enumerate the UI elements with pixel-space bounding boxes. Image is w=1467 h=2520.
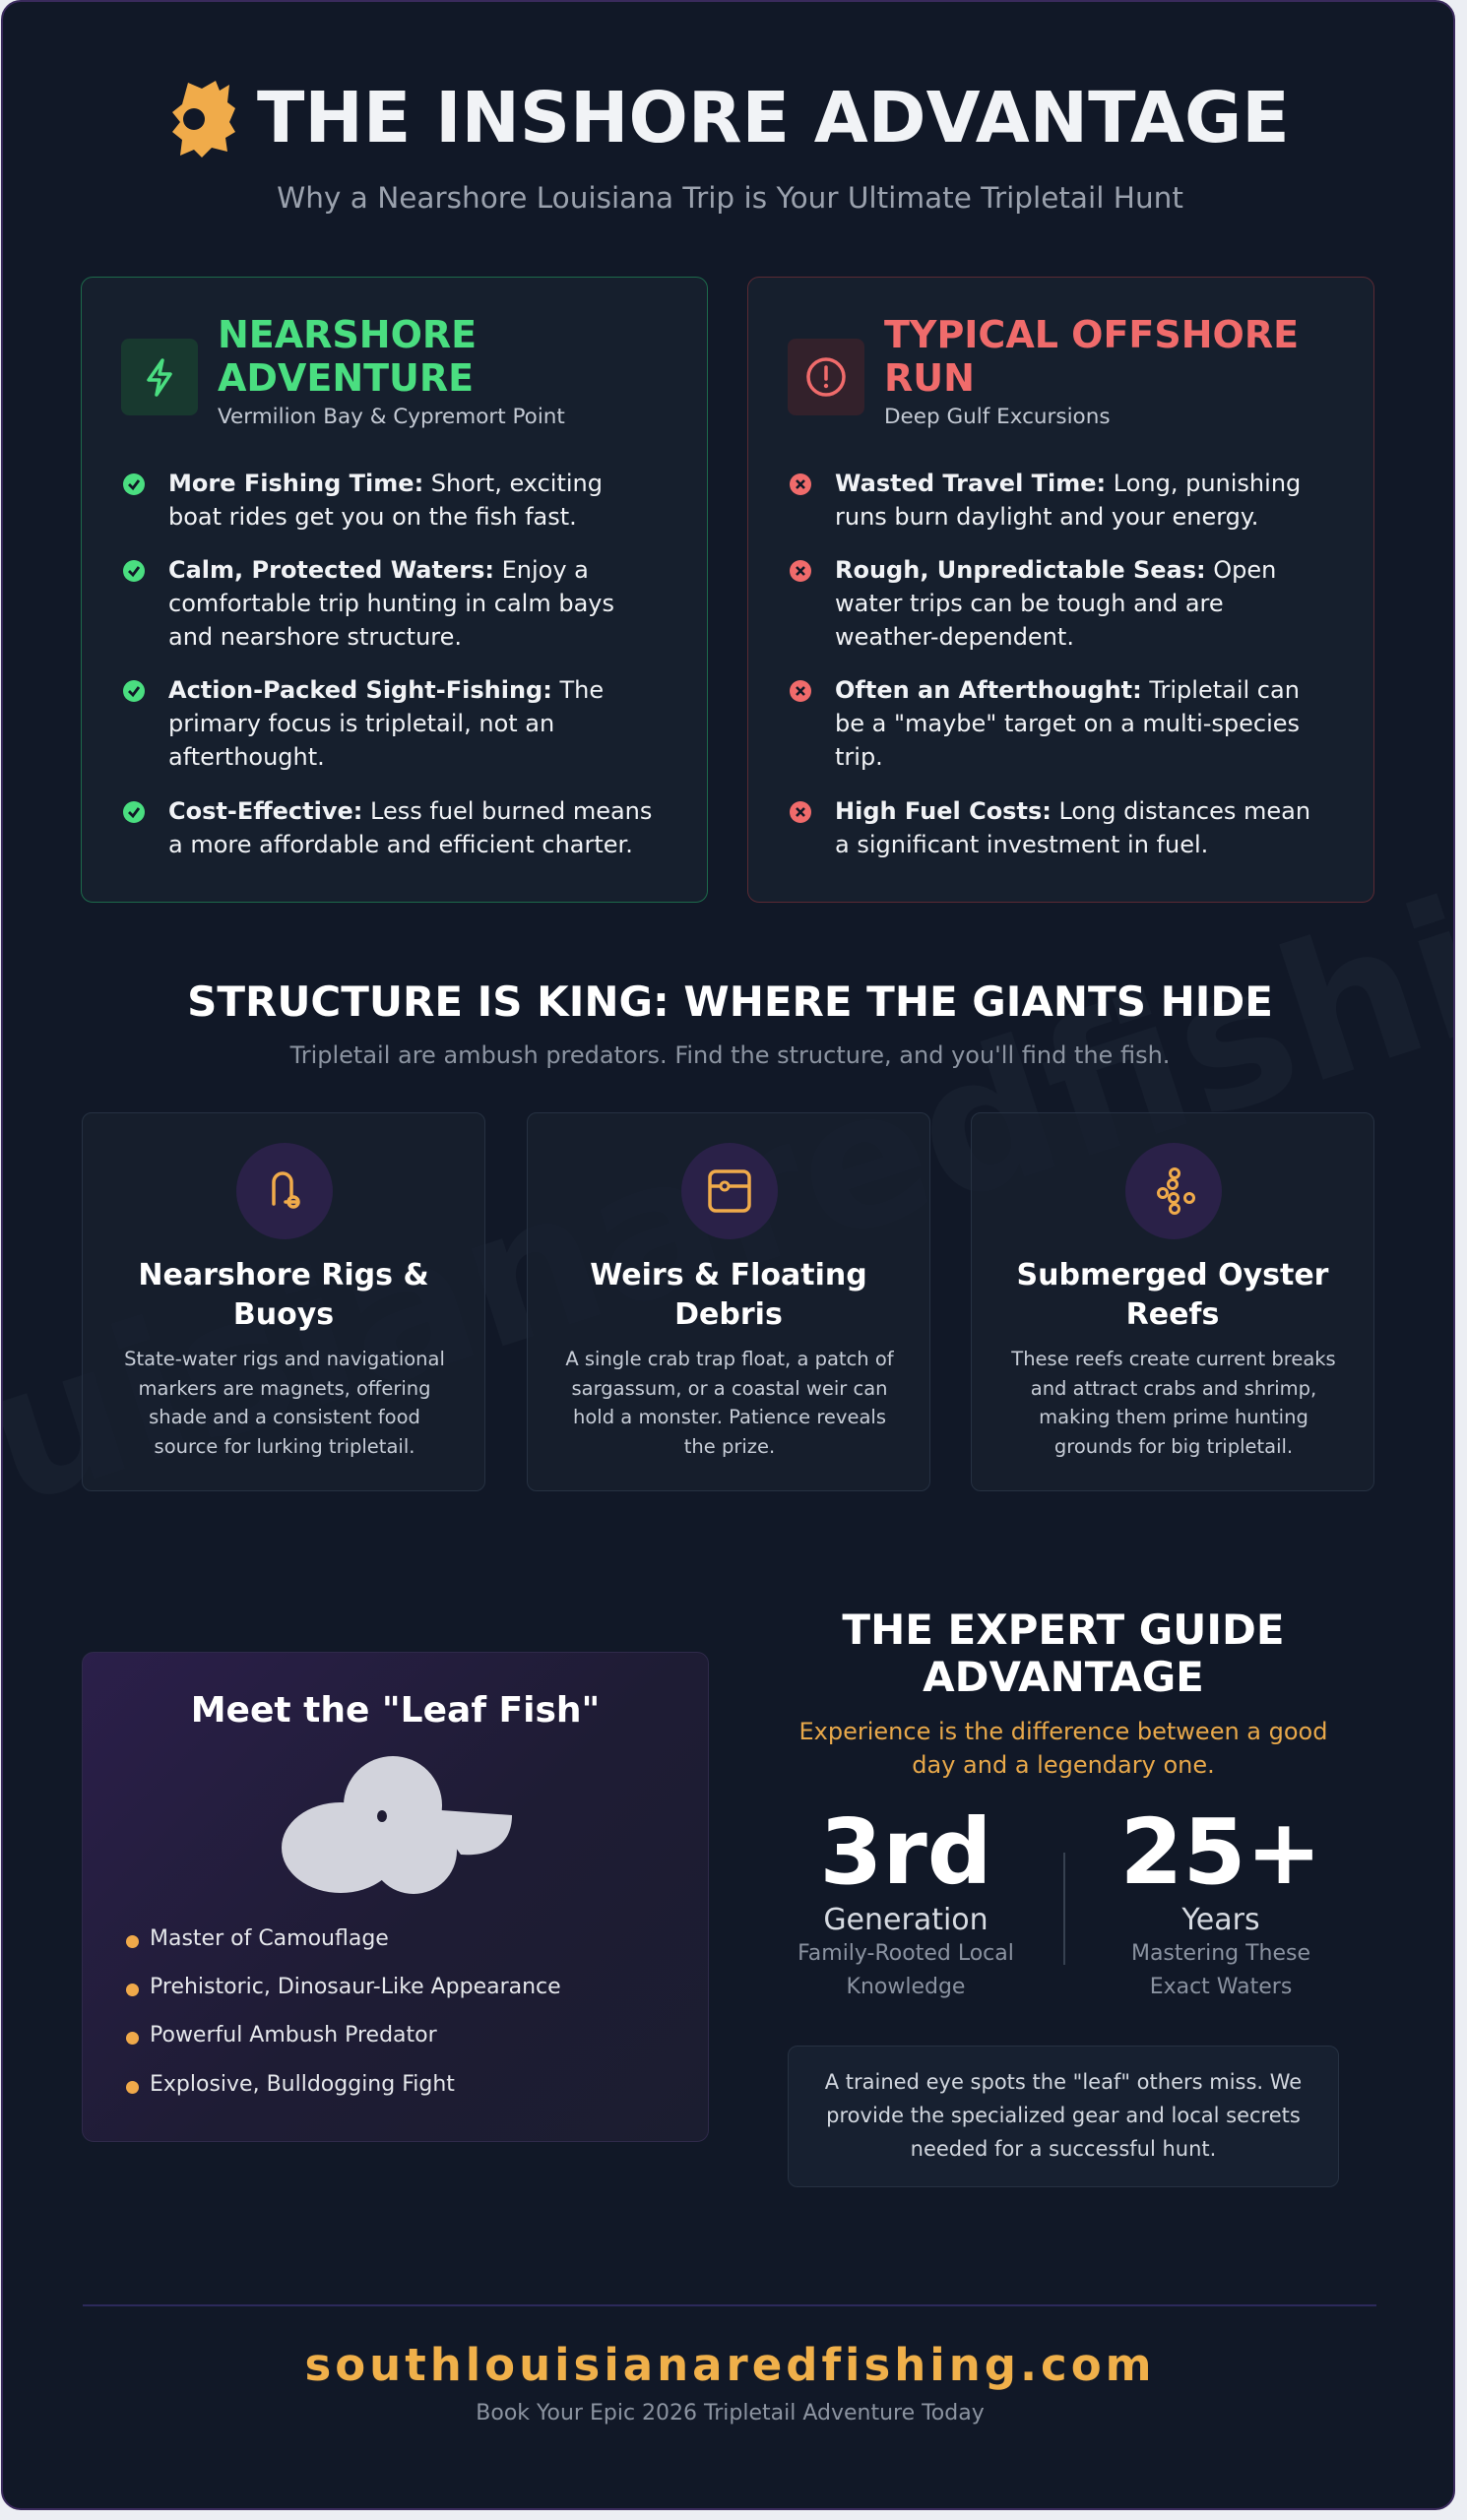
heading: expert guide	[842, 1606, 1285, 1701]
stat: generation: Generation	[823, 1903, 989, 1937]
callout box: needed for a successful hunt.	[911, 2137, 1216, 2161]
list: More Fishing Time: Short, exciting boat rides get you on the fish fast.	[168, 470, 603, 531]
panel: weirs: Debris	[674, 1297, 783, 1332]
list: Wasted Travel Time: Long, punishing runs burn daylight and your energy.	[835, 470, 1301, 531]
icon: fish	[282, 1756, 512, 1894]
icon: alert	[788, 339, 864, 415]
panel: rigs: Nearshore Rigs &	[138, 1258, 429, 1292]
panel: weirs	[527, 1112, 930, 1491]
heading: TYPICAL OFFSHORE	[884, 313, 1299, 356]
subtitle: Why a Nearshore Louisiana Trip is Your Ultimate Tripletail Hunt	[277, 181, 1183, 215]
panel: rigs: State-water rigs and navigational markers are magnets, offering shade and a consistent food source for lurking tripletail.	[124, 1348, 445, 1457]
panel: nearshore: Vermilion Bay & Cypremort Point	[218, 405, 565, 429]
panel: offshore: Rough, Unpredictable Seas: Open water trips can be tough and are weather-dependent.	[835, 556, 1276, 651]
tagline: Experience is the difference between a good	[799, 1718, 1327, 1745]
icon: reef	[1125, 1143, 1222, 1239]
panel: nearshore: Cost-Effective: Less fuel burned means a more affordable and efficient charter.	[168, 797, 652, 858]
footer url: southlouisianaredfishing.com	[304, 2339, 1156, 2391]
panel: leaf fish: Powerful Ambush Predator	[150, 2023, 437, 2048]
stat: generation: Family-Rooted Local	[797, 1941, 1014, 1966]
callout box	[788, 2046, 1339, 2187]
heading: expert guide: ADVANTAGE	[923, 1653, 1204, 1701]
panel: oyster reefs: These reefs create current breaks and attract crabs and shrimp, making them prime hunting grounds for big tripletail.	[1011, 1348, 1336, 1457]
title: THE INSHORE ADVANTAGE	[257, 77, 1290, 158]
icon: logo gear	[172, 81, 235, 158]
tagline	[799, 1718, 1327, 1779]
stat: years: Exact Waters	[1150, 1975, 1292, 1999]
icon: float	[681, 1143, 778, 1239]
stat: years: Mastering These	[1131, 1941, 1310, 1966]
stat: generation: Knowledge	[847, 1975, 965, 1999]
panel: nearshore: Calm, Protected Waters: Enjoy a comfortable trip hunting in calm bays and nearshore structure.	[168, 556, 614, 651]
panel: rigs	[82, 1112, 485, 1491]
panel: leaf fish: Explosive, Bulldogging Fight	[150, 2072, 455, 2097]
panel: offshore: High Fuel Costs: Long distances mean a significant investment in fuel.	[835, 797, 1310, 858]
panel: offshore	[747, 277, 1374, 903]
panel: oyster reefs: Submerged Oyster	[1016, 1258, 1328, 1292]
panel: offshore: Often an Afterthought: Tripletail can be a "maybe" target on a multi-species trip.	[835, 676, 1300, 771]
panel: weirs: Weirs & Floating	[590, 1258, 867, 1292]
section heading: structure: STRUCTURE IS KING: WHERE THE GIANTS HIDE	[187, 977, 1273, 1026]
heading	[218, 313, 477, 400]
callout box: provide the specialized gear and local secrets	[826, 2104, 1301, 2127]
panel: leaf fish: Prehistoric, Dinosaur-Like Appearance	[150, 1975, 561, 1999]
stat: generation: 3rd	[819, 1799, 992, 1905]
stat: years: Years	[1181, 1903, 1260, 1937]
heading: expert guide: THE EXPERT GUIDE	[842, 1606, 1285, 1654]
icon: lightning	[121, 339, 198, 415]
heading: ADVENTURE	[218, 356, 474, 400]
panel: nearshore	[81, 277, 708, 903]
callout box: A trained eye spots the "leaf" others miss. We	[825, 2070, 1302, 2094]
bullet list: Master of Camouflage	[150, 1926, 389, 1951]
panel: oyster reefs	[971, 1112, 1374, 1491]
panel: rigs: Buoys	[233, 1297, 334, 1332]
icon: rig	[236, 1143, 333, 1239]
panel: offshore: Deep Gulf Excursions	[884, 405, 1111, 429]
stat: years: 25+	[1119, 1799, 1322, 1905]
section subtitle: Tripletail are ambush predators. Find the structure, and you'll find the fish.	[290, 1041, 1170, 1069]
heading: NEARSHORE	[218, 313, 477, 356]
panel: weirs: A single crab trap float, a patch of sargassum, or a coastal weir can hold a monster. Patience reveals the prize.	[565, 1348, 894, 1457]
heading: RUN	[884, 356, 975, 400]
panel: leaf fish	[82, 1652, 709, 2142]
footer tagline: Book Your Epic 2026 Tripletail Adventure Today	[476, 2401, 985, 2426]
panel: oyster reefs: Reefs	[1126, 1297, 1219, 1332]
stat: years	[1119, 1799, 1322, 1999]
stat: generation	[797, 1799, 1014, 1999]
heading	[884, 313, 1299, 400]
panel: nearshore: Action-Packed Sight-Fishing: The primary focus is tripletail, not an afterthought.	[168, 676, 604, 771]
heading: Meet the "Leaf Fish"	[191, 1690, 600, 1731]
tagline: day and a legendary one.	[912, 1751, 1215, 1779]
